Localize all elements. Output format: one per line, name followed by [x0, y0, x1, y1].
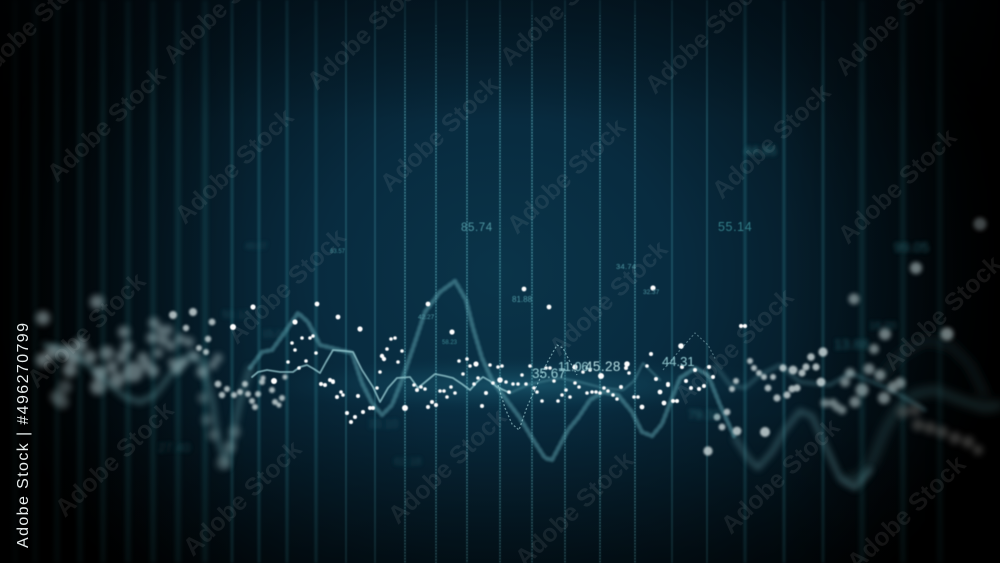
data value labels: sharp: 63.57	[330, 249, 346, 255]
stock watermark text: Adobe Stock	[707, 78, 836, 204]
blurred dot trail, lower right	[897, 404, 983, 455]
data value labels: blurred: 27.40	[158, 440, 191, 455]
data value labels: sharp: 55.14	[718, 220, 752, 234]
data value labels: blurred: 48.07	[245, 241, 268, 251]
data value labels: blurred: 62.18	[394, 456, 422, 468]
heavy blur dots, left cloud	[36, 295, 241, 470]
data value labels: blurred: 99.05	[894, 239, 929, 255]
dashed curves	[498, 333, 716, 430]
stock watermark text: Adobe Stock	[716, 413, 845, 539]
stock watermark text: Adobe Stock	[22, 267, 151, 393]
stock watermark text: Adobe Stock	[170, 103, 299, 229]
data value labels: blurred: 16.00	[869, 320, 897, 332]
data value labels: sharp: 34.74	[616, 262, 636, 271]
data value labels: blurred: 15.24	[262, 329, 287, 340]
data value labels: bright: 35.67	[532, 366, 566, 381]
stock watermark text: Adobe Stock	[42, 61, 171, 187]
vertical grid lines: sharp centre	[405, 15, 635, 563]
thin bright line	[252, 350, 925, 410]
data value labels: bright	[532, 354, 695, 381]
data value labels: sharp: 32.37	[643, 289, 660, 296]
stock watermark text: Adobe Stock	[50, 396, 179, 522]
stock watermark text: Adobe Stock	[178, 435, 307, 561]
data value labels: sharp: 85.74	[461, 222, 493, 234]
thick wave, soft section	[45, 345, 870, 488]
data value labels: sharp: 42.27	[418, 314, 435, 321]
stock watermark text: Adobe Stock	[502, 113, 631, 239]
data value labels: sharp: 58.23	[442, 340, 458, 346]
medium blur dots	[169, 308, 828, 456]
sharp white dots	[230, 285, 747, 424]
blurred wave, far right	[845, 340, 1000, 480]
data value labels: sharp	[330, 220, 752, 346]
stock watermark text: Adobe Stock	[544, 235, 673, 361]
data value labels: sharp: 81.88	[512, 295, 533, 304]
data value labels: blurred: 33.10	[368, 417, 398, 431]
vertical grid lines: blurred mid	[232, 0, 823, 563]
stock watermark text: Adobe Stock	[375, 71, 504, 197]
stock watermark text: Adobe Stock	[222, 223, 351, 349]
data value labels: blurred	[158, 143, 929, 468]
data value labels: bright: 11.06	[558, 360, 588, 374]
stock watermark text: Adobe Stock	[670, 283, 799, 409]
heavy blur dots, right side	[821, 218, 986, 414]
stock watermark text: Adobe Stock	[383, 403, 512, 529]
data value labels: bright: 44.31	[662, 354, 695, 369]
stock watermark text: Adobe Stock	[833, 123, 962, 249]
data value labels: blurred: 79.31	[688, 407, 721, 422]
vertical grid lines: soft glow centre	[346, 0, 707, 563]
vertical stock id caption: Adobe Stock | #496270799	[15, 323, 32, 548]
data value labels: bright: 45.28	[585, 359, 621, 374]
data value labels: blurred: 44.95	[744, 143, 777, 158]
data value labels: blurred: 50.12	[222, 309, 250, 321]
thick dotted wave, main	[250, 281, 735, 460]
data value labels: blurred: 13.88	[834, 336, 869, 352]
